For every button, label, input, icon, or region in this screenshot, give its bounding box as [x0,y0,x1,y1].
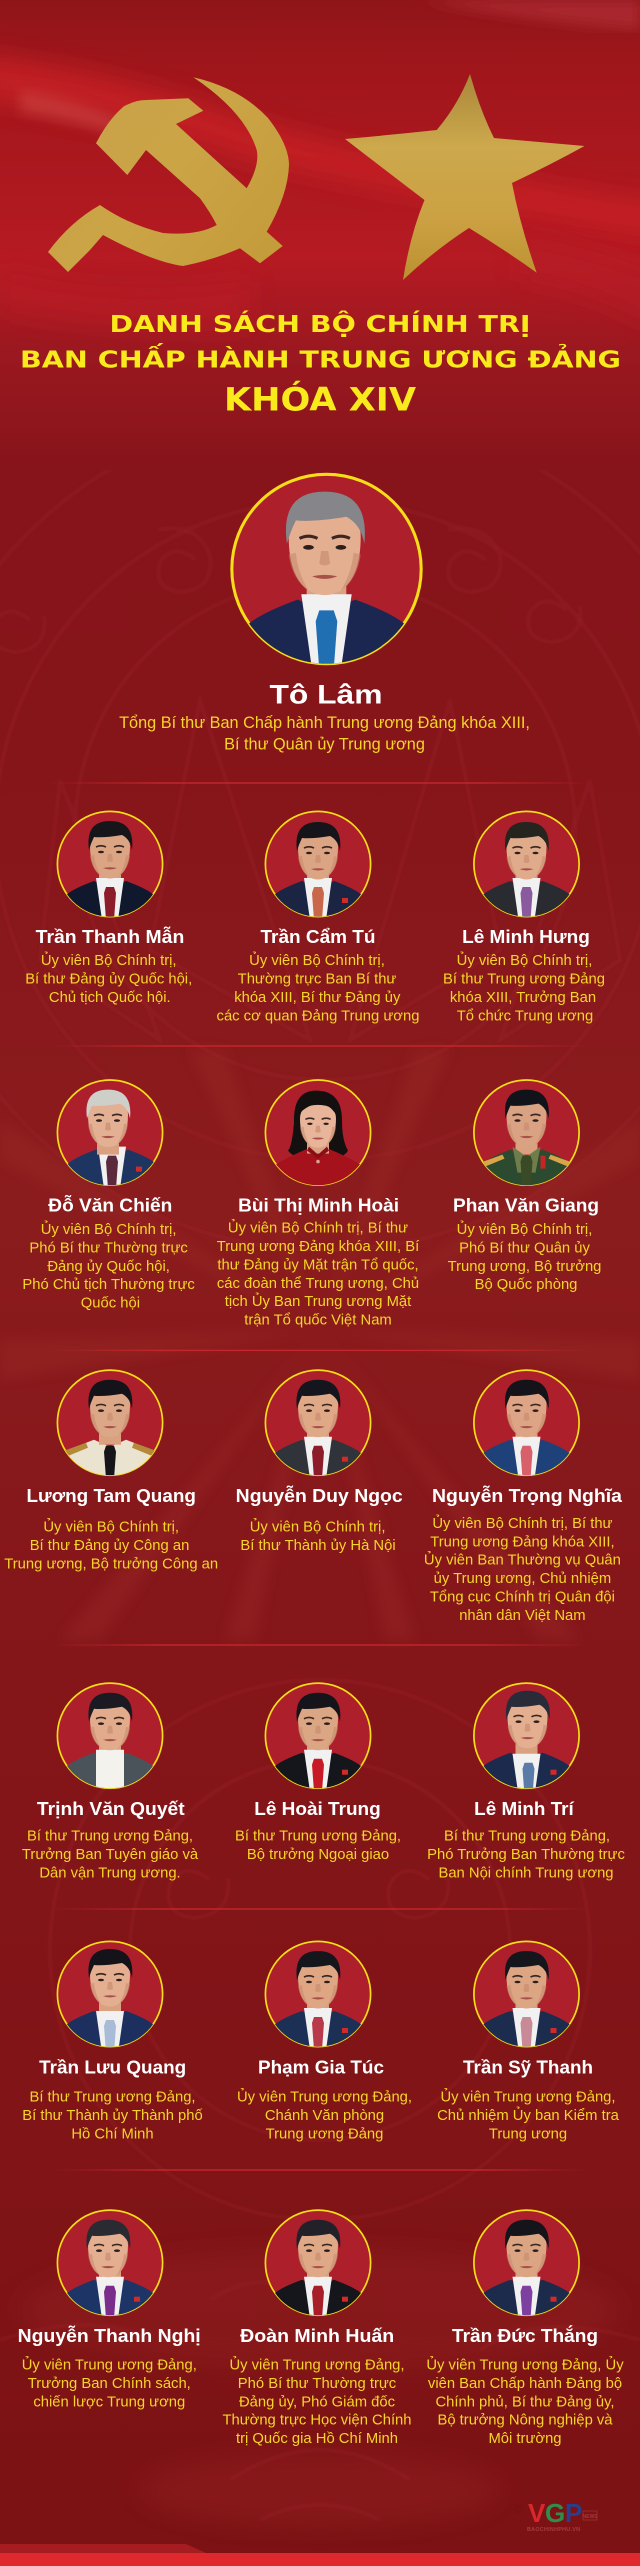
portrait [57,1941,163,2053]
role: Trung ương, Bộ trưởng [448,1259,601,1275]
title: KHÓA XIV [224,380,416,418]
panel: Trần Đức Thắng [426,2210,624,2447]
logo: VGP [515,2498,598,2533]
panel: Lê Minh Trí [427,1683,625,1881]
name: Lê Minh Trí [474,1799,575,1819]
panel: Phan Văn Giang [448,1080,601,1293]
logo: VGP: G [545,2498,565,2528]
name: Nguyễn Duy Ngọc [236,1485,403,1506]
role: Bí thư Trung ương Đảng [443,972,605,988]
role: Ủy viên Bộ Chính trị, [41,951,177,969]
portrait [474,1683,579,1796]
portrait [265,1080,371,1189]
flag backdrop [0,0,640,470]
role: Trung ương Đảng khóa XIII, Bí [217,1239,420,1255]
role: Ủy viên Bộ Chính trị, Bí thư [432,1514,613,1532]
name: Nguyễn Trọng Nghĩa [432,1485,623,1506]
portrait [265,2210,371,2319]
panel: Lê Hoài Trung [235,1683,401,1863]
portrait [474,1370,579,1479]
panel: Phạm Gia Túc [237,1941,412,2142]
name: Trần Cẩm Tú [260,927,376,947]
role: Ủy viên Bộ Chính trị, [249,951,385,969]
role: Trung ương Đảng khóa XIII, [430,1534,615,1550]
logo: VGP: BAOCHINHPHU.VN [527,2527,580,2533]
name: Phan Văn Giang [453,1196,599,1216]
background pattern: star rays [0,1050,640,1640]
role: Tổ chức Trung ương [457,1008,593,1024]
title [20,310,621,418]
portrait [474,811,579,920]
role: Bí thư Trung ương Đảng, [27,1829,193,1845]
name: Trần Thanh Mẫn [36,926,184,947]
title: BAN CHẤP HÀNH TRUNG ƯƠNG ĐẢNG [20,342,621,374]
panel: Trần Cẩm Tú [217,811,419,1024]
role: Bí thư Thành ủy Hà Nội [240,1538,396,1554]
role: Hồ Chí Minh [71,2126,154,2142]
role: Bí thư Thành ủy Thành phố [22,2108,203,2124]
panel: Trần Lưu Quang [22,1941,203,2142]
icon: star [345,74,584,280]
role: Ủy viên Trung ương Đảng, [229,2356,405,2374]
role: thư Đảng ủy Mặt trận Tổ quốc, [217,1257,419,1273]
role: Ủy viên Trung ương Đảng, [440,2088,616,2106]
logo: VGP: NEWS [582,2514,598,2520]
name: Lê Minh Hưng [462,927,590,947]
panel: Nguyễn Thanh Nghị [18,2210,201,2410]
panel: Đỗ Văn Chiến [22,1080,195,1312]
name: Tô Lâm [270,679,382,709]
role: Bí thư Trung ương Đảng, [235,1829,401,1845]
role: Tổng cục Chính trị Quân đội [430,1589,615,1605]
role: Phó Bí thư Thường trực [238,2376,397,2392]
panel: Đoàn Minh Huấn [222,2210,412,2447]
bottom band [0,2544,640,2566]
role: Ủy viên Bộ Chính trị, [457,1220,592,1238]
panel: Nguyễn Trọng Nghĩa [424,1370,623,1624]
portrait [57,811,163,920]
title: DANH SÁCH BỘ CHÍNH TRỊ [110,310,530,338]
role: Ủy viên Trung ương Đảng, Ủy [426,2356,624,2374]
portrait [474,1080,579,1189]
portrait: Tô Lâm [232,474,421,670]
role: các đoàn thể Trung ương, Chủ [217,1276,419,1292]
portrait [57,2210,163,2319]
role: Đảng ủy, Phó Giám đốc [239,2394,396,2410]
portrait [265,1683,371,1792]
role: Bí thư Đảng ủy Công an [30,1538,189,1554]
role: Trưởng Ban Chính sách, [28,2376,191,2392]
role: Tổng Bí thư Ban Chấp hành Trung ương Đảng khóa XIII, [119,714,530,732]
role: Ủy viên Bộ Chính trị, [43,1517,179,1535]
role: Ủy viên Bộ Chính trị, [41,1220,176,1238]
role: Phó Trưởng Ban Thường trực [427,1847,625,1863]
portrait [265,1941,371,2050]
role: Ủy viên Ban Thường vụ Quân [424,1551,621,1569]
portrait [57,1370,163,1479]
role: Ủy viên Bộ Chính trị, Bí thư [228,1218,408,1236]
portrait [265,1370,371,1479]
name: Đoàn Minh Huấn [240,2326,394,2346]
role: Thường trực Ban Bí thư [238,972,396,988]
role: Phó Chủ tịch Thường trực [22,1277,195,1293]
role: ủy Trung ương, Chủ nhiệm [434,1571,611,1587]
role: Trung ương [489,2126,567,2142]
role: Đảng ủy Quốc hội, [47,1259,170,1275]
role: viên Ban Chấp hành Đảng bộ [428,2376,622,2392]
role: Quốc hội [81,1296,140,1312]
name: Lương Tam Quang [26,1486,196,1506]
name: Nguyễn Thanh Nghị [18,2325,201,2346]
role: tịch Ủy Ban Trung ương Mặt [225,1292,411,1310]
role: trị Quốc gia Hồ Chí Minh [236,2431,398,2447]
panel: Lê Minh Hưng [443,811,605,1024]
panel: Trần Thanh Mẫn [25,811,192,1006]
name: Trần Sỹ Thanh [463,2058,593,2078]
panel: Lương Tam Quang [4,1370,218,1572]
role: Phó Bí thư Quân ủy [459,1240,591,1256]
panel: Trần Sỹ Thanh [437,1941,620,2142]
role: Ủy viên Bộ Chính trị, [250,1517,385,1535]
name: Phạm Gia Túc [258,2058,384,2078]
portrait [57,1080,163,1189]
name: Trịnh Văn Quyết [37,1799,185,1819]
role: Bí thư Đảng ủy Quốc hội, [25,972,192,988]
role: Ủy viên Bộ Chính trị, [457,951,592,969]
logo: VGP: © [515,2504,523,2516]
role: khóa XIII, Trưởng Ban [450,990,596,1006]
name: Lê Hoài Trung [254,1799,381,1819]
name: Trần Đức Thắng [452,2325,598,2346]
role: Bộ trưởng Nông nghiệp và [437,2413,613,2429]
role: chiến lược Trung ương [33,2394,185,2410]
role: Bí thư Trung ương Đảng, [444,1829,610,1845]
panel: Tô Lâm [119,474,530,754]
panel: Nguyễn Duy Ngọc [236,1370,403,1554]
role: Dân vận Trung ương. [39,1865,181,1881]
role: Chủ tịch Quốc hội. [49,990,171,1006]
role: Bộ trưởng Ngoại giao [247,1847,389,1863]
panel: Trịnh Văn Quyết [22,1683,199,1881]
name: Trần Lưu Quang [39,2058,186,2078]
role: khóa XIII, Bí thư Đảng ủy [234,990,401,1006]
role: Ban Nội chính Trung ương [438,1865,614,1881]
role: nhân dân Việt Nam [459,1608,586,1624]
role: Trung ương, Bộ trưởng Công an [4,1556,218,1572]
role: Bí thư Trung ương Đảng, [29,2090,196,2106]
role: Trưởng Ban Tuyên giáo và [22,1847,199,1863]
role: các cơ quan Đảng Trung ương [217,1008,419,1024]
panel: Bùi Thị Minh Hoài [217,1080,420,1329]
role: Phó Bí thư Thường trực [29,1240,188,1256]
portrait [265,811,371,920]
name: Đỗ Văn Chiến [48,1194,172,1216]
role: Môi trường [488,2431,562,2447]
logo: VGP: V [528,2498,546,2528]
role: Bí thư Quân ủy Trung ương [224,736,425,754]
role: Thường trực Học viện Chính [222,2413,412,2429]
role: Chủ nhiệm Ủy ban Kiểm tra [437,2106,620,2124]
role: Ủy viên Trung ương Đảng, [22,2356,197,2374]
role: Chính phủ, Bí thư Đảng ủy, [435,2394,615,2410]
icon: hammer and sickle [48,77,289,272]
portrait [57,1683,163,1792]
portrait [474,2210,579,2319]
role: Chánh Văn phòng [265,2108,384,2124]
logo: VGP: P [565,2498,582,2528]
role: Ủy viên Trung ương Đảng, [237,2088,412,2106]
name: Bùi Thị Minh Hoài [238,1196,399,1216]
role: Trung ương Đảng [266,2126,383,2142]
role: Bộ Quốc phòng [475,1277,577,1293]
portrait [474,1941,579,2050]
role: trận Tổ quốc Việt Nam [244,1313,392,1329]
